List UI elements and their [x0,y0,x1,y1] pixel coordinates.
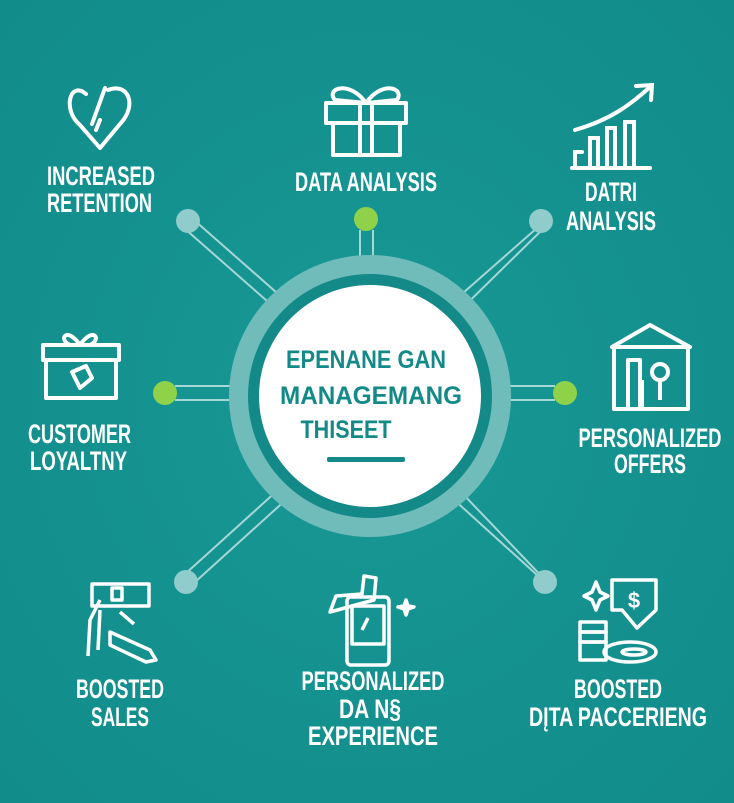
icon: coins and money: $ [628,588,640,613]
label: customer loyalty: LOYALTNY [30,446,127,476]
label: customer loyalty [28,419,131,476]
label: personalized experience: EXPERIENCE [308,721,438,751]
label: personalized experience [302,666,444,751]
label: personalized experience: PERSONALIZED [302,666,444,696]
label: personalized offers [578,423,722,479]
label: customer loyalty: CUSTOMER [28,419,131,449]
label: increased retention: RETENTION [47,188,152,218]
label: boosted sales [76,674,164,732]
label: boosted data processing [529,674,707,732]
connector lines [175,220,555,583]
icon: growth chart [572,85,652,168]
icon: store [612,325,690,409]
center hub [229,255,511,537]
label: data analysis: DATA ANALYSIS [295,167,437,197]
center title [280,346,462,444]
icon: hand with bill [88,584,156,662]
icon: phone [330,576,414,665]
label: data analysis right: DATRI [585,177,637,207]
icon: heart [70,88,129,148]
icon: gift left [43,335,119,398]
label: data analysis right [566,177,656,236]
label: personalized offers: OFFERS [614,449,686,479]
icon: coins and money [580,580,656,662]
label: boosted data processing: BOOSTED [574,674,662,704]
dots [153,207,577,594]
label: data analysis right: ANALYSIS [566,206,656,236]
center title: EPENANE GAN [286,346,446,374]
center title: MANAGEMANG [280,382,462,410]
label: personalized experience: DA N§ [339,694,401,724]
label: boosted sales: BOOSTED [76,674,164,704]
center title: THISEET [300,416,392,444]
icon: gift top [326,88,406,155]
label: boosted sales: SALES [91,702,149,732]
label: increased retention [47,161,155,218]
label: increased retention: INCREASED [47,161,155,191]
